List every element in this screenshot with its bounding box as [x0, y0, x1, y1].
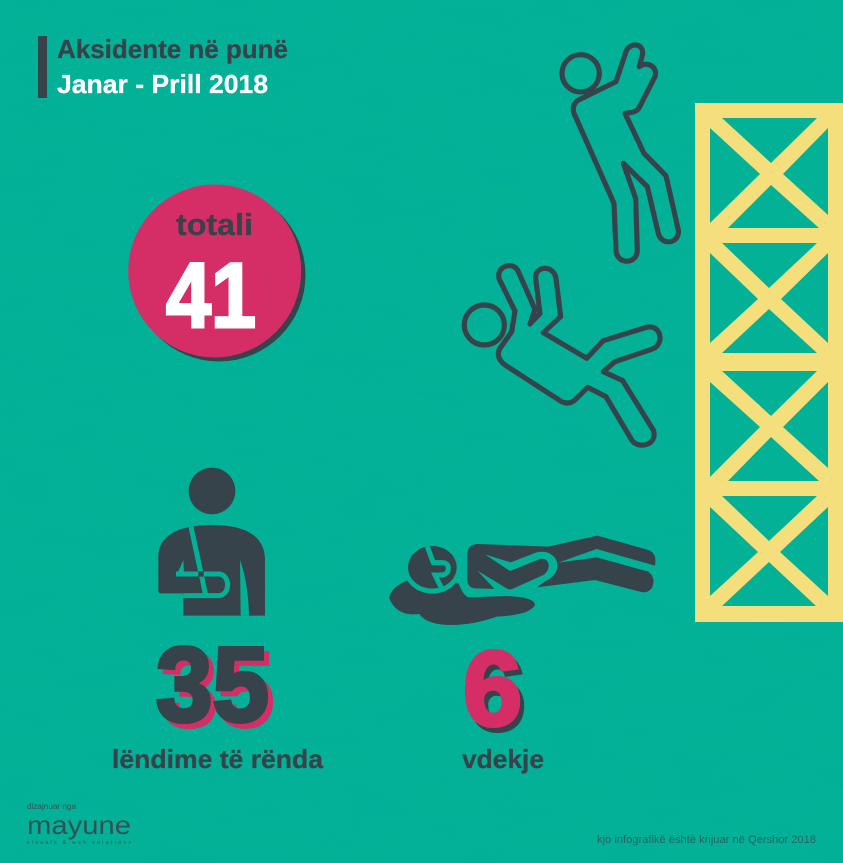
credit logo: mayune	[27, 810, 131, 840]
stat: serious injuries: lëndime të rënda	[112, 744, 324, 774]
credit logo: visuals & web solutions	[27, 840, 132, 846]
title: Janar - Prill 2018	[57, 69, 268, 99]
stat: deaths	[462, 630, 544, 774]
stat: deaths: vdekje	[462, 744, 544, 774]
stat: deaths: 6	[467, 635, 526, 753]
total circle	[128, 184, 306, 362]
icon: injured person with arm sling	[158, 468, 265, 616]
title	[38, 34, 288, 99]
title: Aksidente në punë	[57, 34, 288, 64]
icon: fatally injured person lying in pool of blood	[389, 536, 655, 625]
total circle: 41	[166, 245, 256, 347]
stat: deaths: 6	[463, 630, 522, 748]
scaffold tower	[695, 103, 843, 622]
stat: serious injuries	[112, 626, 324, 774]
total circle: totali	[176, 207, 253, 242]
credit logo: dizajnuar nga	[27, 801, 76, 811]
credit logo	[27, 801, 132, 846]
icon: worker falling upright	[562, 45, 678, 261]
stat: serious injuries: 35	[161, 631, 274, 749]
stat: serious injuries: 35	[156, 626, 269, 744]
icon: worker falling backward	[464, 266, 660, 445]
footer note: kjo infografikë është krijuar në Qershor 2018	[597, 834, 816, 846]
